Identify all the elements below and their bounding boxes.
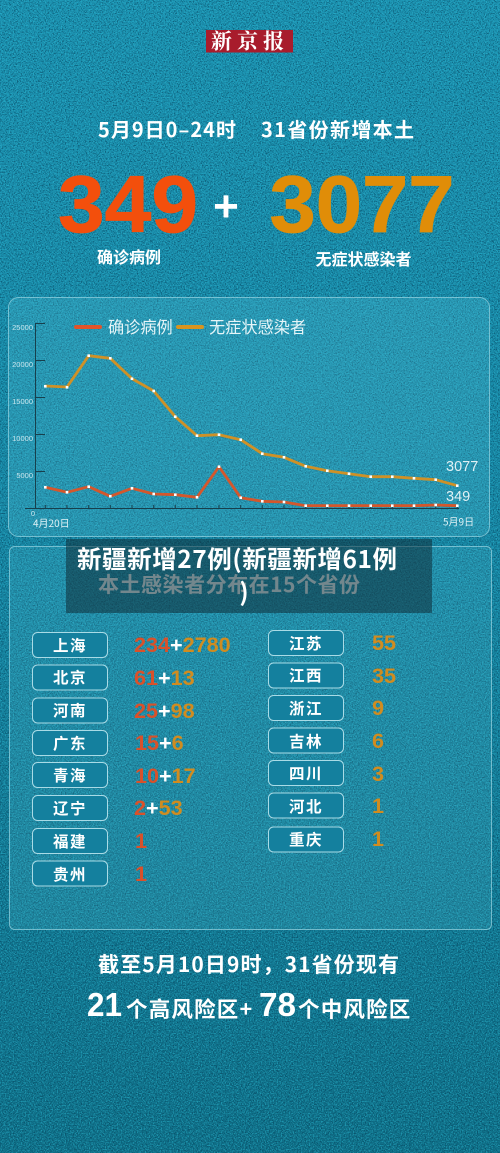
- end value labels: 3077: [446, 459, 478, 475]
- province rows: left column: 广东: [53, 732, 87, 754]
- province rows: left column: [32, 632, 231, 886]
- chart legend: [74, 314, 306, 338]
- big number: 349 confirmed: 349: [58, 160, 198, 250]
- chart axes: [12, 323, 474, 530]
- footer: risk areas: 个高风险区+: [126, 993, 253, 1024]
- province rows: right column: 江苏: [289, 632, 323, 654]
- chart axes: 5月9日: [443, 514, 474, 528]
- province rows: left column: 2+53: [134, 795, 183, 820]
- end value labels: [446, 459, 478, 505]
- overlay caption bar: 新疆新增27例(新疆新增61例: [77, 541, 397, 576]
- chart legend: 无症状感染者: [209, 314, 306, 338]
- big number: 3077 asymptomatic: 无症状感染者: [315, 246, 412, 270]
- province rows: right column: 1: [372, 793, 384, 818]
- line: asymptomatic: [44, 354, 459, 487]
- province rows: right column: 3: [372, 761, 384, 786]
- panel: provinces: [10, 546, 492, 930]
- province rows: left column: 北京: [53, 666, 87, 688]
- subheading: 本土感染者分布在15个省份: [98, 569, 360, 599]
- footer: risk areas: 截至5月10日9时，31省份现有: [98, 949, 399, 979]
- footer: risk areas: 78: [259, 986, 296, 1023]
- overlay caption bar: ): [239, 574, 249, 609]
- province rows: right column: 浙江: [289, 697, 323, 719]
- province rows: left column: 福建: [53, 830, 87, 852]
- province rows: right column: 1: [372, 826, 384, 851]
- province rows: left column: 61+13: [134, 665, 195, 690]
- overlay caption bar: [66, 539, 432, 613]
- panel: trend chart: [8, 298, 490, 536]
- province rows: right column: 9: [372, 695, 384, 720]
- chart axes: 25000: [12, 323, 33, 332]
- province rows: left column: 15+6: [135, 730, 184, 755]
- heading: date and scope: [98, 114, 414, 143]
- province rows: left column: 234+2780: [134, 632, 231, 657]
- province rows: right column: 6: [372, 728, 384, 753]
- line: confirmed: [44, 465, 459, 507]
- logo: 新京报: 新京报: [211, 26, 289, 56]
- big number: 349 confirmed: 确诊病例: [97, 244, 161, 268]
- heading: date and scope: 5月9日0–24时: [98, 114, 236, 143]
- province rows: left column: 1: [135, 828, 147, 853]
- province rows: left column: 25+98: [134, 698, 195, 723]
- province rows: left column: 辽宁: [53, 797, 87, 819]
- chart axes: 15000: [12, 397, 33, 406]
- province rows: right column: 35: [372, 663, 396, 688]
- province rows: left column: 贵州: [53, 863, 87, 885]
- footer: risk areas: 21: [87, 986, 122, 1023]
- province rows: right column: 江西: [289, 664, 323, 686]
- footer: risk areas: [87, 949, 412, 1024]
- province rows: left column: 上海: [53, 634, 87, 656]
- province rows: right column: 四川: [289, 762, 323, 784]
- chart legend: 确诊病例: [108, 314, 173, 338]
- plus sign: +: [213, 182, 239, 231]
- province rows: right column: 吉林: [289, 730, 323, 752]
- chart axes: 10000: [12, 434, 33, 443]
- province rows: left column: 1: [135, 861, 147, 886]
- province rows: right column: 55: [372, 630, 396, 655]
- big number: 3077 asymptomatic: 3077: [270, 160, 454, 250]
- chart axes: 20000: [12, 360, 33, 369]
- chart axes: 5000: [16, 471, 33, 480]
- province rows: right column: [268, 630, 396, 852]
- chart axes: 0: [31, 509, 35, 518]
- province rows: right column: 河北: [289, 795, 323, 817]
- footer: risk areas: 个中风险区: [298, 993, 412, 1024]
- province rows: right column: 重庆: [289, 828, 323, 850]
- province rows: left column: 10+17: [135, 763, 196, 788]
- end value labels: 349: [446, 489, 470, 505]
- heading: date and scope: 31省份新增本土: [261, 114, 414, 143]
- chart axes: 4月20日: [33, 515, 70, 530]
- province rows: left column: 青海: [53, 764, 87, 786]
- province rows: left column: 河南: [53, 699, 87, 721]
